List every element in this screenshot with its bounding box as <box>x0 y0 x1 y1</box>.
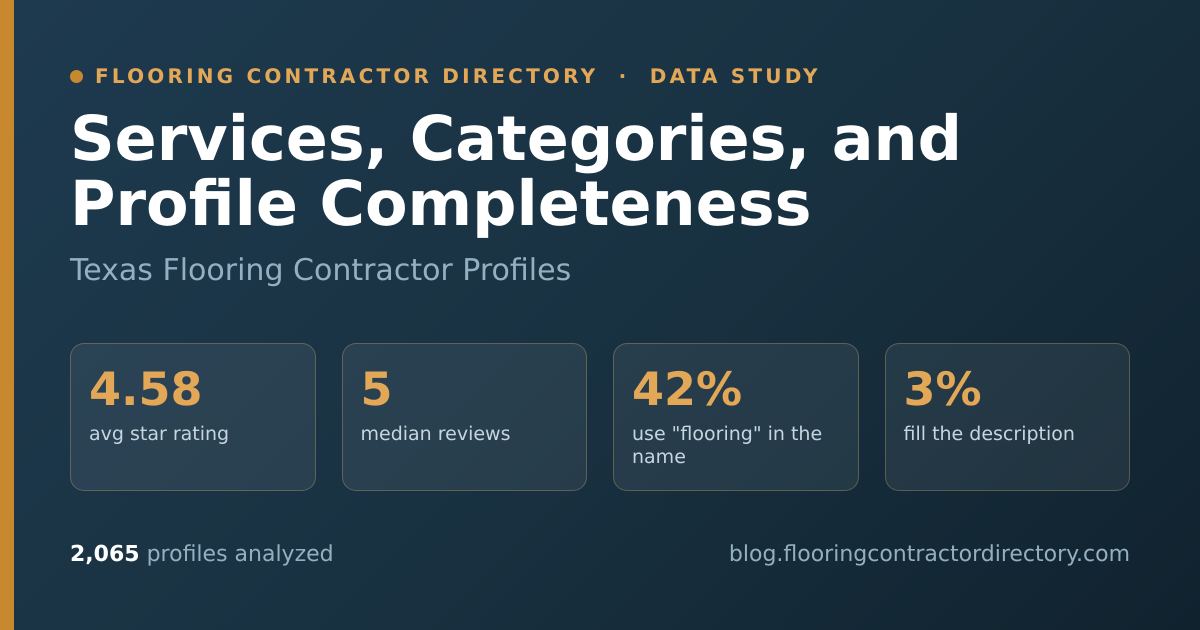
stat card: reviews: median reviews <box>360 423 510 445</box>
profiles analyzed: 2,065 profiles analyzed <box>70 542 334 567</box>
title: Profile Completeness <box>70 167 812 240</box>
stat card: description: 3% <box>904 362 982 416</box>
stat card: reviews <box>342 343 587 491</box>
title: Services, Categories, and <box>70 102 962 175</box>
accent bar <box>0 0 14 630</box>
stat card: rating: avg star rating <box>89 423 229 445</box>
stat card: description: fill the description <box>904 423 1075 445</box>
stat card: reviews: 5 <box>360 362 393 416</box>
stat card: name <box>613 343 858 491</box>
stat card: name: 42% <box>632 362 742 416</box>
eyebrow dot <box>70 70 83 83</box>
stat card: description <box>884 343 1130 491</box>
stat card: rating: 4.58 <box>89 362 202 416</box>
site url: blog.flooringcontractordirectory.com <box>729 542 1130 567</box>
stat card: rating <box>70 343 316 491</box>
subtitle: Texas Flooring Contractor Profiles <box>70 253 571 288</box>
eyebrow: FLOORING CONTRACTOR DIRECTORY · DATA STUDY <box>95 64 821 88</box>
title <box>70 102 962 240</box>
stat card: name: use "flooring" in the name <box>632 423 822 468</box>
